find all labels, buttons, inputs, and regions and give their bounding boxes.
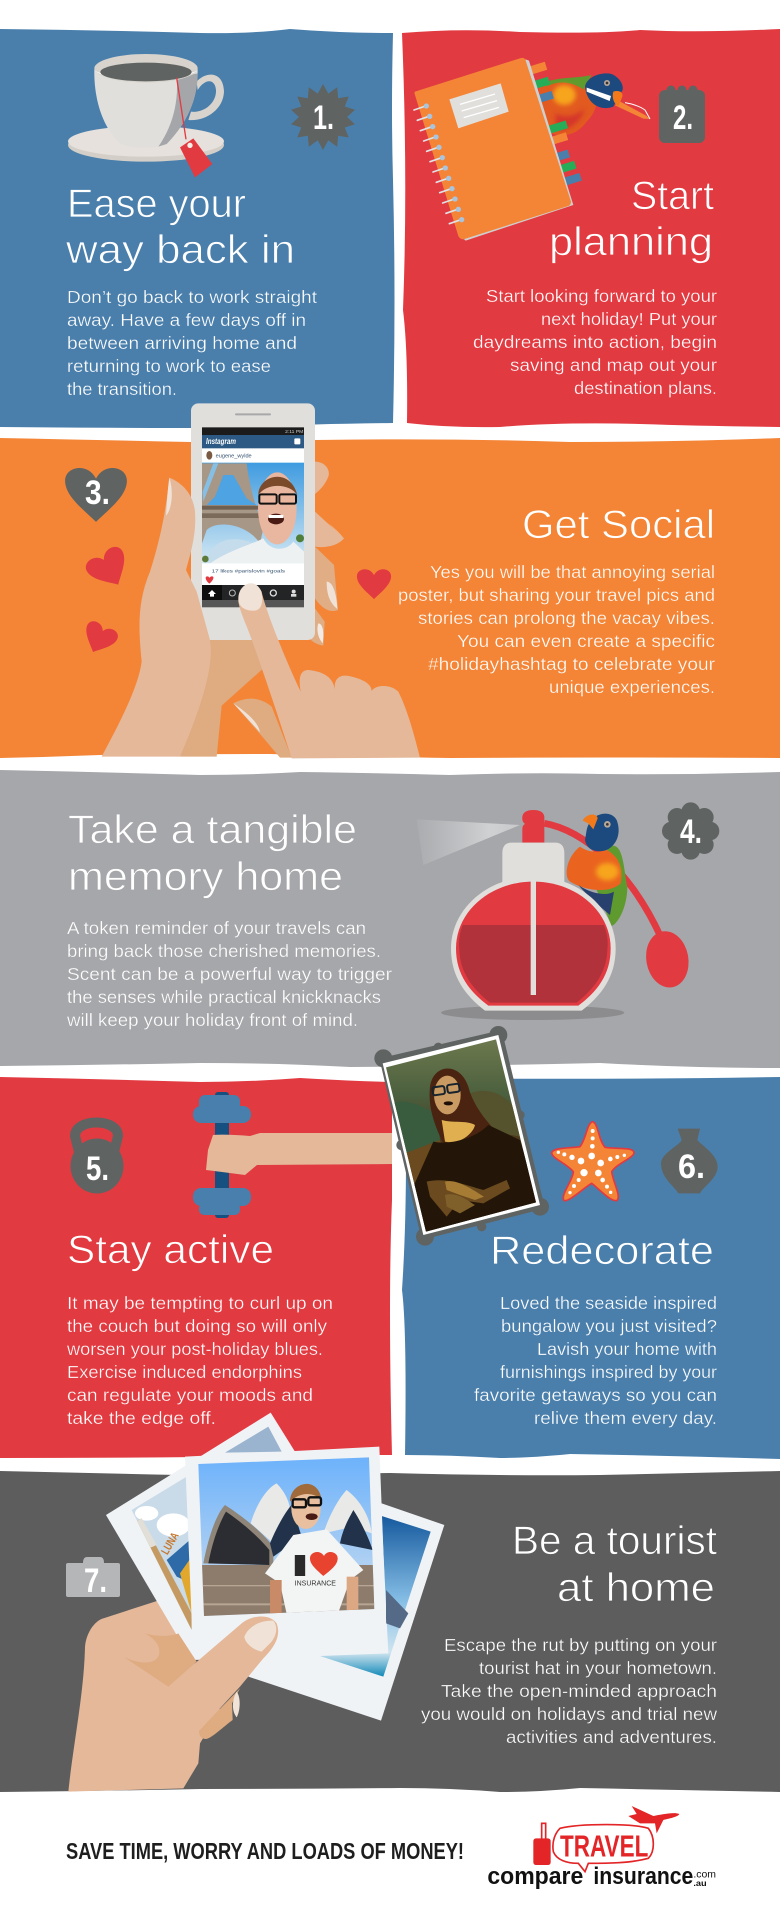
- body text: Exercise induced endorphins: [67, 1362, 302, 1382]
- body text: Take the open-minded approach: [441, 1681, 717, 1701]
- body text: furnishings inspired by your: [500, 1362, 717, 1382]
- phone: eugene_wylde: [216, 453, 252, 459]
- polaroid: Sydney Opera House: [185, 1447, 387, 1660]
- body text: the senses while practical knickknacks: [67, 987, 381, 1007]
- panel 7: be a tourist at home: [0, 1413, 780, 1792]
- logo: Travel Compare Insurance: [487, 1806, 716, 1890]
- illustration: arm lifting dumbbell: [193, 1092, 392, 1218]
- heading: [65, 182, 295, 272]
- body text: the transition.: [67, 379, 177, 399]
- heading: at home: [557, 1566, 715, 1610]
- body text: Loved the seaside inspired: [500, 1293, 717, 1313]
- logo: Travel Compare Insurance: .com: [693, 1870, 716, 1881]
- phone: 17 likes #parislovin #goals: [212, 568, 285, 573]
- heading: way back in: [65, 228, 295, 272]
- badge: number 2 calendar: [659, 86, 705, 143]
- panel 4: take a tangible memory home: [0, 770, 780, 1068]
- logo: Travel Compare Insurance: TRAVEL: [560, 1830, 648, 1864]
- body text: [474, 1293, 717, 1428]
- heading: Be a tourist: [512, 1519, 717, 1563]
- body text: [473, 286, 717, 398]
- illustration: perfume bottle with lorikeet: [417, 810, 693, 1020]
- heading: Get Social: [522, 503, 715, 547]
- heading: Take a tangible: [68, 808, 357, 852]
- badge: number 5 kettlebell: [70, 1122, 124, 1194]
- body text: away. Have a few days off in: [67, 310, 306, 330]
- body text: can regulate your moods and: [67, 1385, 313, 1405]
- badge: number 6 vase: [661, 1129, 718, 1193]
- body text: A token reminder of your travels can: [67, 918, 366, 938]
- body text: the couch but doing so will only: [67, 1316, 327, 1336]
- body text: [66, 1293, 333, 1428]
- heading: planning: [549, 220, 713, 264]
- body text: Lavish your home with: [537, 1339, 717, 1359]
- body text: returning to work to ease: [67, 356, 271, 376]
- body text: activities and adventures.: [506, 1727, 717, 1747]
- body text: Scent can be a powerful way to trigger: [67, 964, 392, 984]
- badge: number 7 camera: [66, 1557, 120, 1600]
- illustration: hand holding polaroid photos: [68, 1413, 444, 1792]
- badge: number 5 kettlebell: 5.: [86, 1150, 109, 1188]
- body text: take the edge off.: [67, 1408, 216, 1428]
- icon: starfish: [552, 1122, 634, 1201]
- body text: between arriving home and: [67, 333, 297, 353]
- badge: number 1 starburst: 1.: [313, 99, 334, 137]
- badge: number 6 vase: 6.: [678, 1148, 705, 1186]
- heading: Ease your: [67, 182, 246, 226]
- body text: #holidayhashtag to celebrate your: [428, 654, 715, 674]
- body text: [421, 1635, 717, 1747]
- polaroid: Sydney Opera House: I: [290, 1549, 310, 1583]
- body text: relive them every day.: [534, 1408, 717, 1428]
- body text: [398, 562, 715, 697]
- polaroid: Luna Park: [106, 1413, 295, 1663]
- illustration: spiral notebook: [414, 58, 582, 241]
- phone: Instagram: [206, 437, 236, 446]
- badge: number 1 starburst: [291, 84, 355, 150]
- body text: worsen your post-holiday blues.: [66, 1339, 323, 1359]
- illustration: hands holding phone: [102, 403, 420, 758]
- panel 1: ease your way back in: [0, 29, 394, 428]
- body text: bring back those cherished memories.: [67, 941, 381, 961]
- body text: saving and map out your: [510, 355, 717, 375]
- panel 3: get social: [0, 403, 780, 758]
- icon: red hearts: [78, 544, 391, 659]
- body text: Don’t go back to work straight: [67, 287, 317, 307]
- badge: number 2 calendar: 2.: [673, 99, 693, 137]
- panel 5: stay active: [0, 1077, 392, 1458]
- body text: next holiday! Put your: [541, 309, 717, 329]
- badge: number 3 heart: 3.: [85, 474, 110, 512]
- body text: Start looking forward to your: [486, 286, 717, 306]
- body text: will keep your holiday front of mind.: [66, 1010, 358, 1030]
- body text: destination plans.: [574, 378, 717, 398]
- heading: Stay active: [67, 1228, 274, 1272]
- body text: It may be tempting to curl up on: [67, 1293, 333, 1313]
- logo: Travel Compare Insurance: .au: [693, 1878, 707, 1888]
- body text: tourist hat in your hometown.: [479, 1658, 717, 1678]
- heading: Start: [631, 174, 714, 218]
- body text: Yes you will be that annoying serial: [430, 562, 715, 582]
- logo: Travel Compare Insurance: insurance: [593, 1863, 693, 1890]
- body text: [66, 918, 392, 1030]
- heading: [549, 174, 714, 264]
- illustration: Mona Lisa portrait: [374, 1026, 549, 1246]
- polaroid: Sydney Opera House: INSURANCE: [295, 1578, 336, 1587]
- panel 6: redecorate: [374, 1026, 780, 1459]
- badge: number 7 camera: 7.: [84, 1562, 107, 1600]
- heading: [512, 1519, 717, 1610]
- heading: [68, 808, 357, 899]
- body text: Escape the rut by putting on your: [444, 1635, 717, 1655]
- body text: [67, 287, 317, 399]
- body text: poster, but sharing your travel pics and: [398, 585, 715, 605]
- icon: tea cup: [68, 54, 224, 177]
- phone: 2:11 PM: [285, 429, 303, 435]
- body text: favorite getaways so you can: [474, 1385, 717, 1405]
- body text: bungalow you just visited?: [501, 1316, 717, 1336]
- body text: unique experiences.: [549, 677, 715, 697]
- heading: memory home: [68, 855, 343, 899]
- heading: Redecorate: [490, 1229, 714, 1273]
- body text: you would on holidays and trial new: [421, 1704, 717, 1724]
- polaroid: beach: [248, 1503, 444, 1721]
- body text: stories can prolong the vacay vibes.: [418, 608, 715, 628]
- illustration: lorikeet with pencil: [538, 73, 650, 135]
- phone: [191, 403, 315, 640]
- logo: Travel Compare Insurance: compare: [487, 1863, 583, 1890]
- panel 2: start planning: [402, 29, 780, 427]
- footer tagline: SAVE TIME, WORRY AND LOADS OF MONEY!: [66, 1838, 464, 1864]
- body text: daydreams into action, begin: [473, 332, 717, 352]
- badge: number 4 flower: [662, 802, 719, 860]
- badge: number 3 heart: [65, 468, 127, 522]
- polaroid: Luna Park: LUNA: [160, 1531, 182, 1557]
- body text: You can even create a specific: [457, 631, 715, 651]
- badge: number 4 flower: 4.: [680, 813, 702, 851]
